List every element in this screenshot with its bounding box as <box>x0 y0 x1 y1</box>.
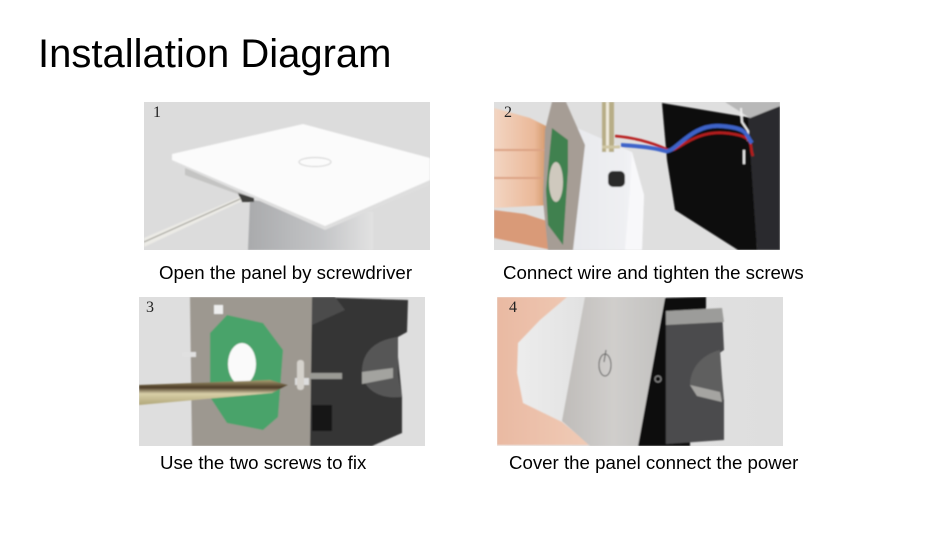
photo: switch panel and screwdriver <box>144 102 430 250</box>
panel: step 2 connect wire <box>494 102 804 283</box>
step number 2: 2 <box>504 104 512 121</box>
photo: hand, module, wires and black box <box>494 102 780 250</box>
photo: module, circuit board and screwdriver <box>139 297 425 446</box>
step number 3: 3 <box>146 299 154 316</box>
title: Installation Diagram <box>38 32 392 76</box>
step number 4: 4 <box>509 299 517 316</box>
panel: step 3 fix with screws <box>139 297 425 473</box>
caption 3: Use the two screws to fix <box>160 452 367 473</box>
photo: hand covering switch with panel <box>497 297 783 446</box>
panel: step 1 open the panel <box>144 102 430 283</box>
panel: step 4 cover the panel <box>497 297 798 473</box>
caption 4: Cover the panel connect the power <box>509 452 798 473</box>
step number 1: 1 <box>153 104 161 121</box>
caption 1: Open the panel by screwdriver <box>159 262 412 283</box>
caption 2: Connect wire and tighten the screws <box>503 262 804 283</box>
